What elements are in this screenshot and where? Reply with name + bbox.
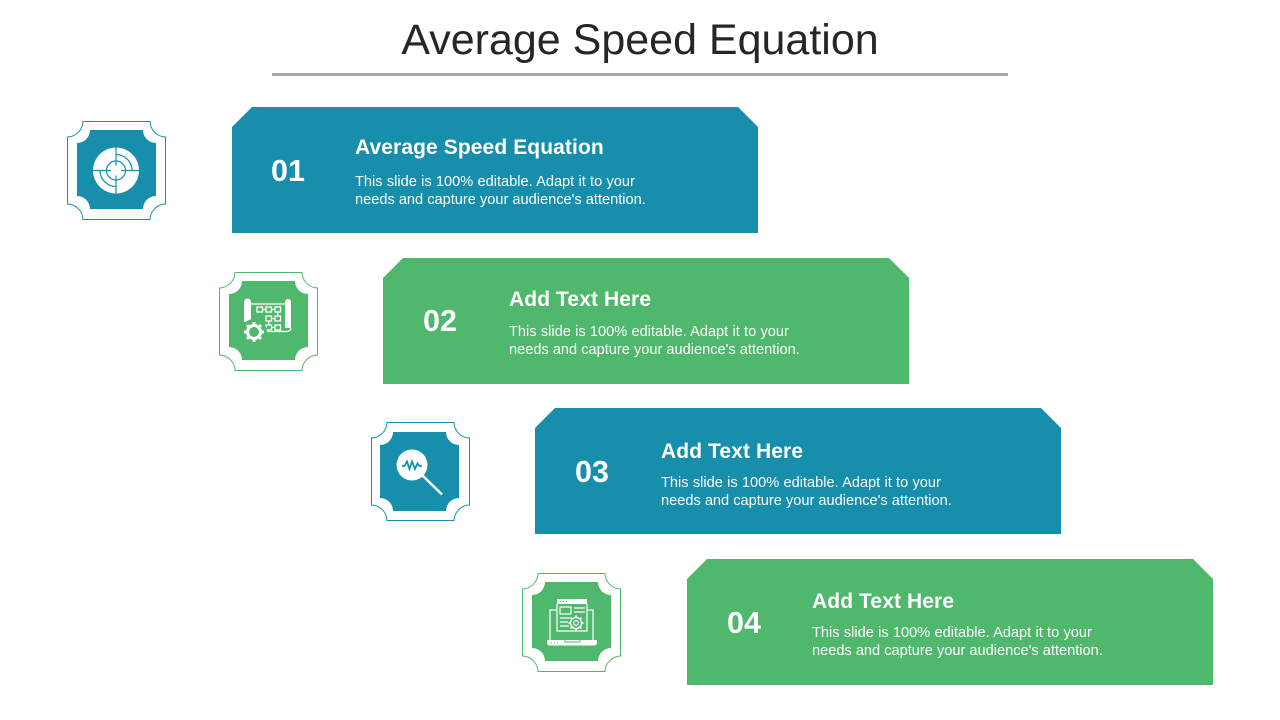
- heading 02: Add Text Here: [509, 288, 651, 311]
- panel: card 01: [232, 107, 758, 233]
- heading 03: Add Text Here: [661, 440, 803, 463]
- text block 01: needs and capture your audience's attention.: [355, 192, 646, 208]
- panel: card 03: [535, 408, 1061, 534]
- icon: magnifier with waveform: [371, 422, 470, 521]
- text block 04: This slide is 100% editable. Adapt it to your: [812, 625, 1092, 641]
- text block 02: [509, 325, 798, 357]
- text block 02: needs and capture your audience's attention.: [509, 342, 800, 358]
- title: Average Speed Equation: [401, 16, 879, 64]
- heading 01: Average Speed Equation: [355, 136, 604, 159]
- text block 03: [661, 476, 950, 508]
- text block 04: needs and capture your audience's attention.: [812, 643, 1103, 659]
- text block 01: [355, 175, 644, 207]
- text block 03: This slide is 100% editable. Adapt it to your: [661, 475, 941, 491]
- text block 03: needs and capture your audience's attention.: [661, 493, 952, 509]
- text block 02: This slide is 100% editable. Adapt it to your: [509, 324, 789, 340]
- panel: card 02: [383, 258, 909, 384]
- number 04: 04: [727, 606, 761, 640]
- text block 04: [812, 626, 1102, 658]
- number 03: 03: [575, 455, 609, 489]
- text block 01: This slide is 100% editable. Adapt it to your: [355, 174, 635, 190]
- icon: laptop with gear: [522, 573, 621, 672]
- panel: card 04: [687, 559, 1213, 685]
- number 01: 01: [271, 154, 305, 188]
- number 02: 02: [423, 304, 457, 338]
- heading 04: Add Text Here: [812, 590, 954, 613]
- icon: blueprint with gear: [219, 272, 318, 371]
- icon: target: [67, 121, 166, 220]
